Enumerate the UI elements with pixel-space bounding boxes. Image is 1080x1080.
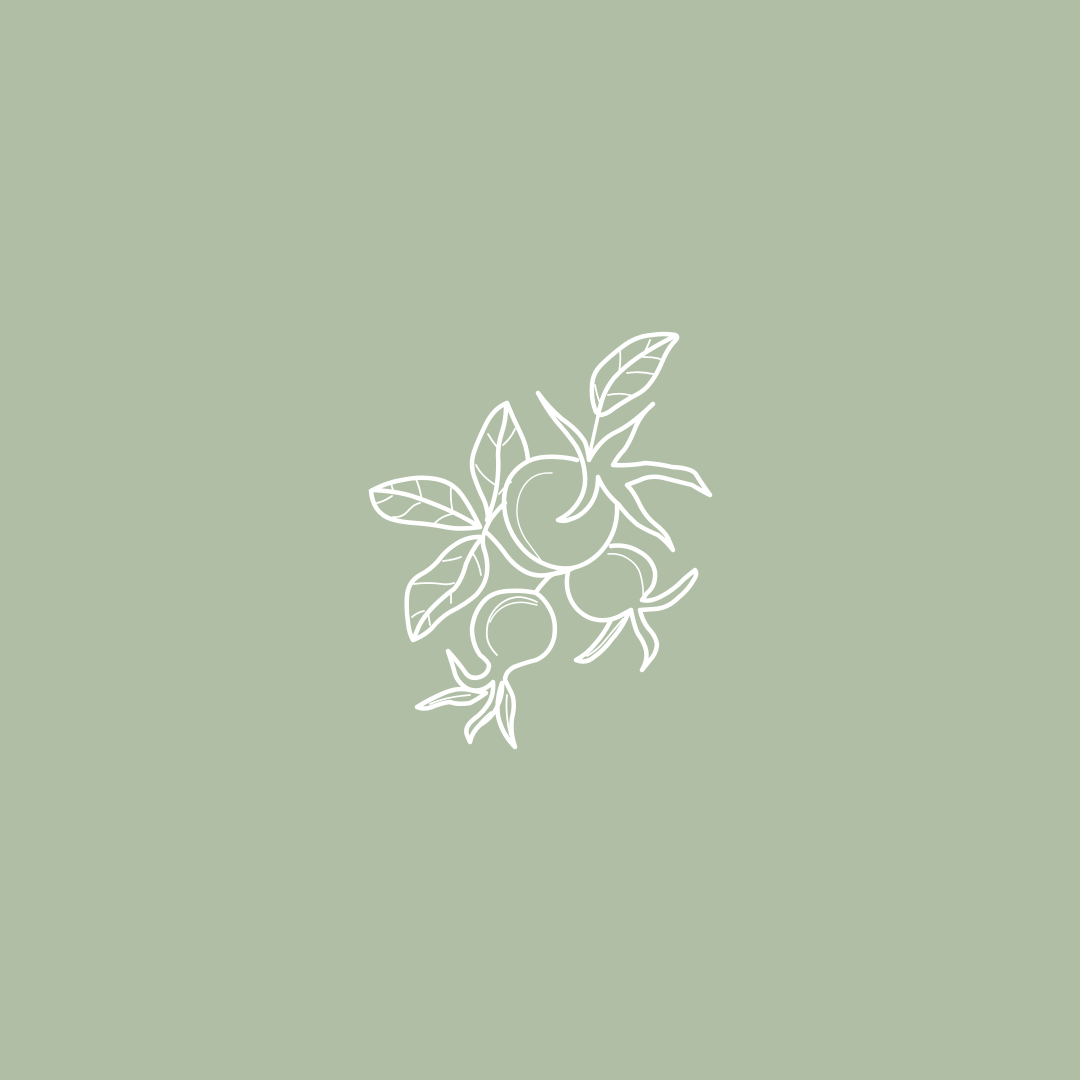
fruit highlight: large rose hip	[517, 473, 552, 563]
fruit highlight: right rose hip	[608, 554, 643, 598]
fruit: right rose hip	[567, 546, 696, 670]
leaf: top right	[590, 334, 677, 453]
fruit: lower rose hip	[417, 591, 555, 747]
sepals: large rose hip	[538, 393, 710, 550]
leaf: lower left	[407, 537, 487, 640]
leaf: top left	[472, 403, 528, 522]
leaf: far left	[371, 478, 480, 528]
fruit: large rose hip	[504, 457, 617, 568]
sepals: right rose hip	[631, 570, 696, 670]
fruit highlight: lower rose hip	[487, 597, 537, 655]
main stem: junction and curved stalk	[484, 503, 573, 592]
sepal: lower rose hip left	[417, 689, 486, 708]
